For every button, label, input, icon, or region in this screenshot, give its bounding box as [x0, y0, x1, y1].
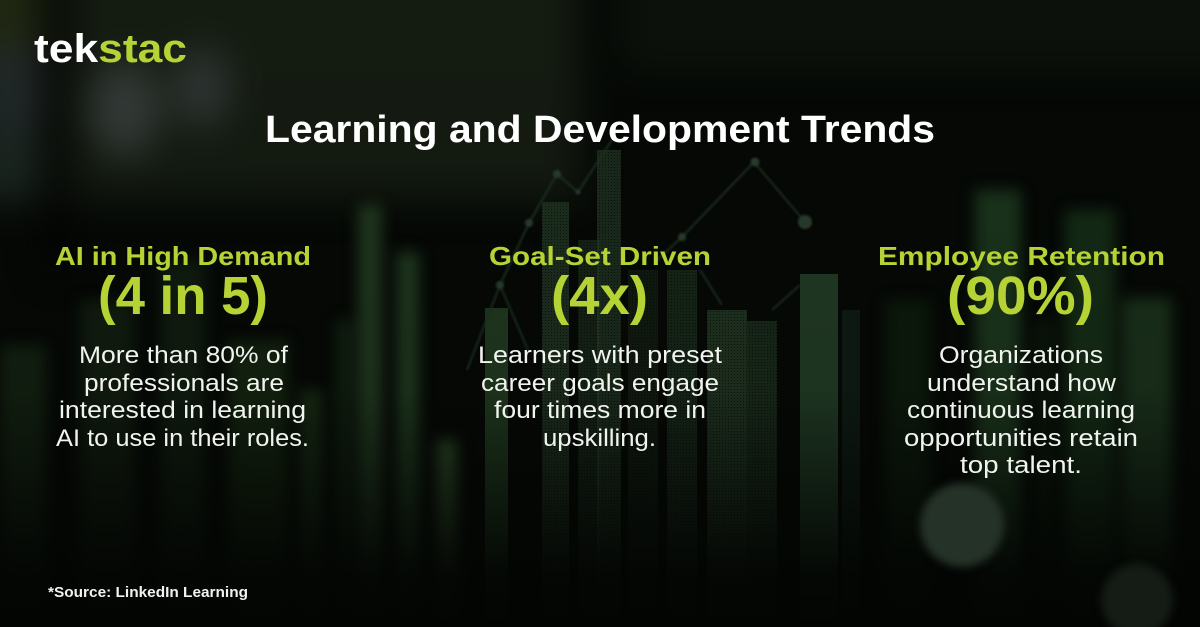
- body text: understand how: [927, 370, 1117, 397]
- body text: upskilling.: [543, 425, 656, 452]
- body text: professionals are: [84, 370, 284, 397]
- background: right blurred bars: [885, 190, 1172, 627]
- background: bottom-right bokeh circles: [920, 483, 1173, 627]
- source note: *Source: LinkedIn Learning: [48, 584, 248, 601]
- body text: [56, 342, 309, 452]
- body text: [904, 342, 1138, 479]
- heading: AI in High Demand: [55, 241, 311, 271]
- body text: career goals engage: [481, 370, 719, 397]
- heading: Employee Retention: [878, 241, 1165, 271]
- panel: Goal-Set Driven: [478, 241, 722, 452]
- body text: opportunities retain: [904, 425, 1138, 452]
- statistic: 90%: (90%): [947, 266, 1094, 326]
- statistic: 4 in 5: (4 in 5): [98, 266, 268, 326]
- body text: interested in learning: [59, 397, 306, 424]
- heading: Goal-Set Driven: [489, 241, 711, 271]
- body text: continuous learning: [907, 397, 1135, 424]
- body text: AI to use in their roles.: [56, 425, 309, 452]
- background: left blurred bars: [0, 205, 457, 627]
- background: top bokeh glow: [0, 0, 1200, 270]
- body text: top talent.: [960, 452, 1082, 479]
- body text: Learners with preset: [478, 342, 722, 369]
- panel: Employee Retention: [878, 241, 1165, 479]
- logo: tekstac: tekstac: [34, 27, 187, 71]
- body text: four times more in: [494, 397, 706, 424]
- background: sharp mesh bars: [485, 150, 860, 627]
- body text: More than 80% of: [79, 342, 288, 369]
- statistic: 4x: (4x): [551, 266, 648, 326]
- body text: Organizations: [939, 342, 1103, 369]
- panel: AI in High Demand: [55, 241, 311, 452]
- body text: [478, 342, 722, 452]
- title: Learning and Development Trends: [265, 109, 935, 151]
- background: trend lines with dots: [467, 140, 812, 370]
